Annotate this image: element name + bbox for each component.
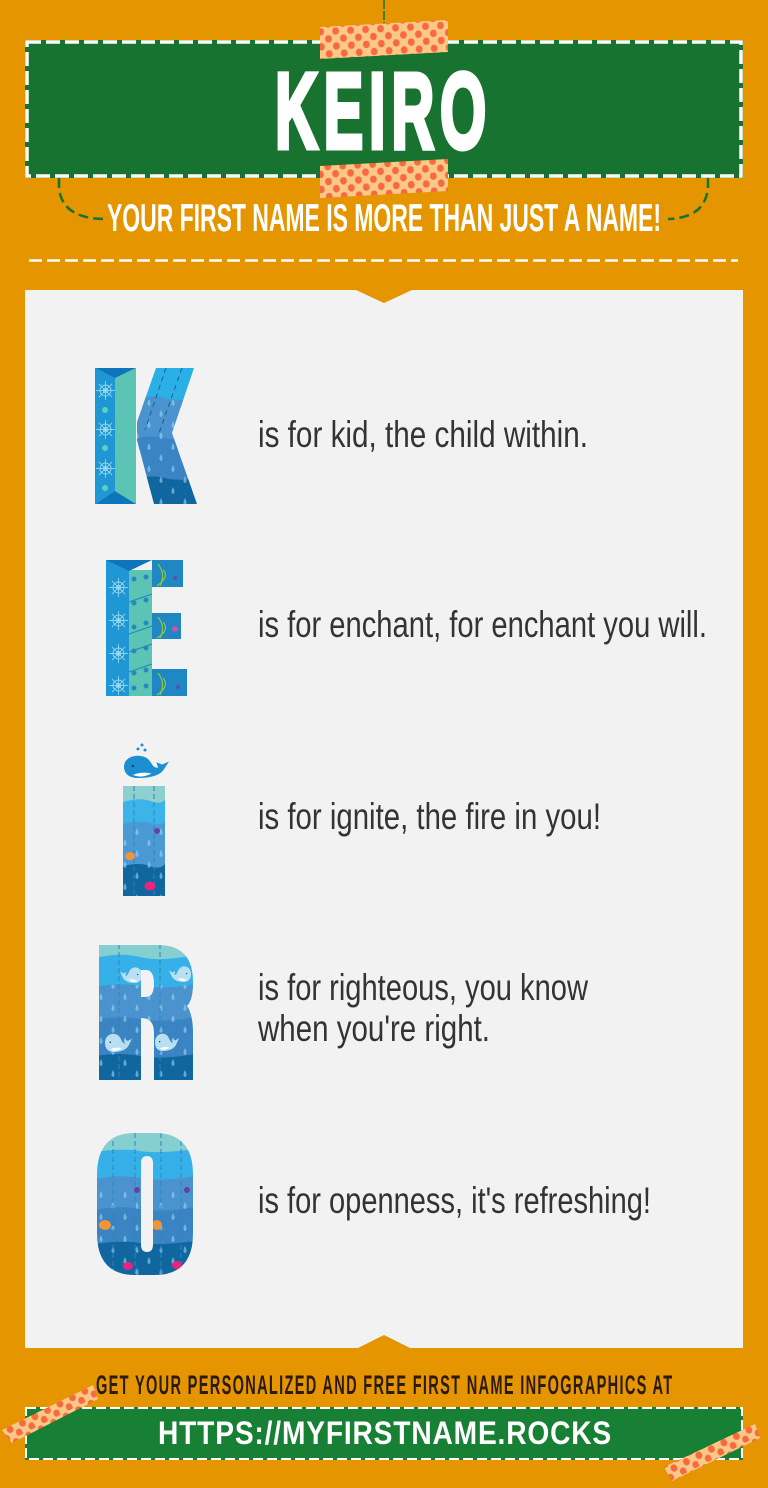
text: R: is for righteous, you know (258, 967, 588, 1008)
text: R (257, 967, 588, 1049)
tape: footer left (2, 1385, 98, 1443)
title: KEIRO: KEIRO (275, 51, 486, 172)
text: R: when you're right. (257, 1008, 490, 1049)
letter O (95, 1133, 195, 1275)
letter K (95, 368, 200, 504)
connector: right (668, 178, 708, 219)
letter R (95, 944, 195, 1080)
text: O: is for openness, it's refreshing! (258, 1180, 651, 1221)
text: K: is for kid, the child within. (258, 414, 588, 455)
letter I (123, 786, 165, 896)
title banner (25, 40, 743, 178)
text: I: is for ignite, the fire in you! (258, 796, 601, 837)
footer URL: HTTPS://MYFIRSTNAME.ROCKS (158, 1416, 611, 1451)
footer prompt: GET YOUR PERSONALIZED AND FREE FIRST NAME INFOGRAPHICS AT (96, 1369, 673, 1400)
tape: top (320, 20, 448, 59)
panel: letter meanings (25, 290, 743, 1349)
tape: bottom (320, 159, 448, 198)
letter E (106, 560, 187, 696)
connector: left (59, 178, 103, 219)
subtitle: YOUR FIRST NAME IS MORE THAN JUST A NAME! (107, 196, 661, 240)
icon: whale (124, 744, 169, 778)
footer banner (25, 1407, 743, 1460)
tape: footer right (664, 1424, 760, 1481)
hanging string (383, 0, 385, 24)
